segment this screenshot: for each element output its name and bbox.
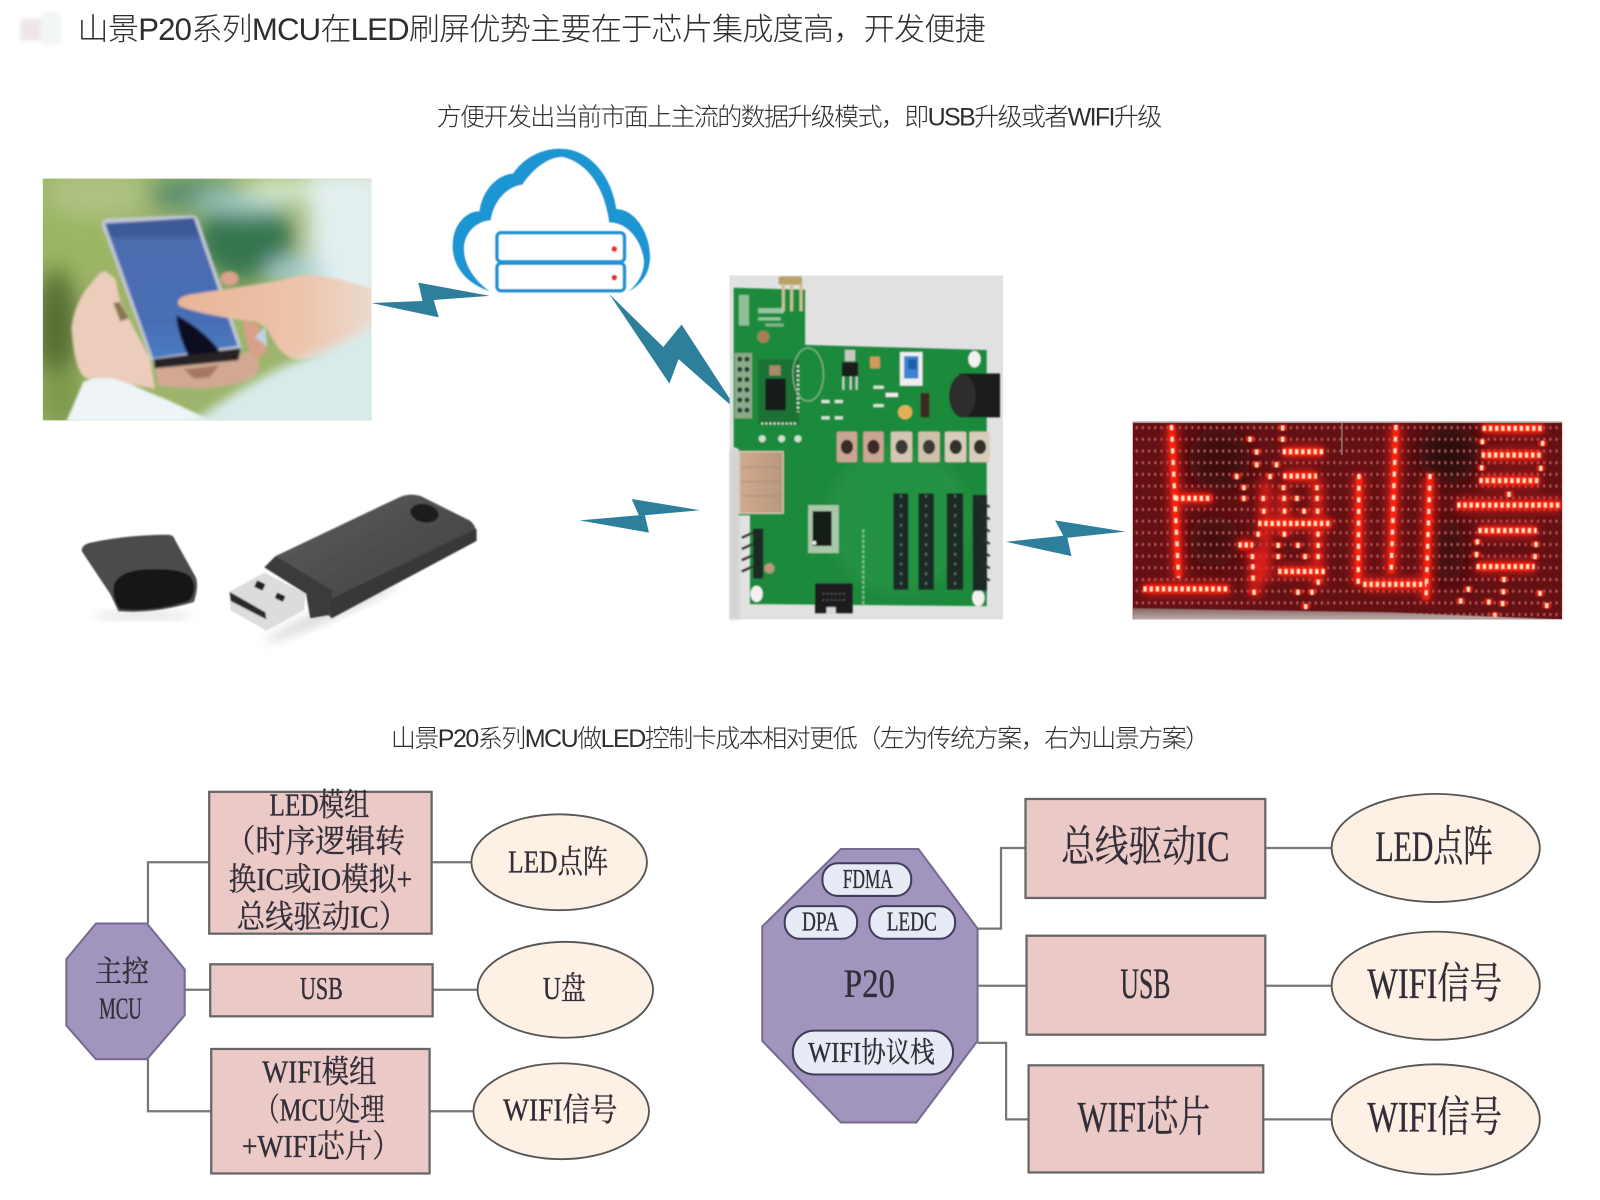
- push buttons: [837, 432, 990, 462]
- ellipse: U disk: [478, 942, 653, 1038]
- icon: cloud server: [453, 149, 650, 296]
- pill: LEDC: LEDC: [887, 906, 937, 937]
- USB socket: [739, 452, 783, 513]
- subheading: cost comparison: 山景P20系列MCU做LED控制卡成本相对更低（左为传统方案，右为山景方案）: [391, 725, 1210, 753]
- fingers under phone: [155, 352, 259, 388]
- box: WIFI module: +WIFI芯片）: [242, 1129, 400, 1164]
- photo: USB flash drive: [82, 495, 477, 648]
- box: bus driver IC: [1026, 799, 1265, 898]
- node: P20 chip: P20: [844, 962, 895, 1006]
- arrow: USB to board: [580, 499, 700, 533]
- diagram: Shanjing scheme: [762, 794, 1540, 1174]
- ellipse: LED matrix: LED点阵: [508, 844, 608, 879]
- voltage regulator: [845, 350, 855, 361]
- box: LED module: 换IC或IO模拟+: [229, 862, 412, 897]
- node: main MCU: 主控: [95, 956, 149, 989]
- module chip: [758, 359, 799, 424]
- photo: LED dot matrix panel showing 上海山景: [1133, 421, 1562, 620]
- mounting holes: [968, 351, 981, 367]
- ellipse: WIFI signal: WIFI信号: [1367, 960, 1502, 1008]
- connectors: [978, 848, 1332, 1119]
- diagram: traditional scheme: [66, 787, 653, 1173]
- title icon: [20, 12, 61, 45]
- left header: [753, 529, 763, 579]
- arrow: board to LED panel: [1006, 520, 1126, 556]
- ellipse: LED matrix: [471, 814, 647, 910]
- panel frame strip: [1133, 608, 1562, 620]
- title: 山景P20系列MCU在LED刷屏优势主要在于芯片集成度高，开发便捷: [78, 12, 986, 47]
- bright vertical LED columns: [1171, 425, 1430, 600]
- phone body: [102, 215, 242, 367]
- ellipse: WIFI signal: [473, 1063, 649, 1159]
- bright horizontal LED rows: [1143, 428, 1562, 589]
- pin headers: [893, 493, 987, 591]
- sleeve: [66, 378, 213, 421]
- drive body: [276, 495, 477, 618]
- ellipse: LED matrix: LED点阵: [1376, 824, 1493, 871]
- controller chip: [808, 505, 839, 553]
- box: USB: USB: [1120, 961, 1170, 1008]
- box: bus driver IC: 总线驱动IC: [1061, 824, 1230, 871]
- box: USB: USB: [300, 971, 343, 1006]
- photo: hand holding smartphone: [42, 178, 372, 420]
- pill: FDMA: FDMA: [843, 863, 893, 894]
- LED halo: [1143, 425, 1562, 618]
- ellipse: WIFI signal: [1332, 932, 1540, 1040]
- pill: FDMA: [822, 863, 911, 896]
- box: USB: [210, 964, 433, 1016]
- ellipse: U disk: U盘: [543, 971, 586, 1006]
- blue switch: [900, 352, 922, 386]
- box: LED module: 总线驱动IC）: [237, 900, 407, 935]
- arrow: cloud to board: [609, 294, 731, 405]
- subheading: upgrade modes: 方便开发出当前市面上主流的数据升级模式，即USB升级或者WIFI升级: [437, 104, 1162, 132]
- box: WIFI chip: WIFI芯片: [1078, 1095, 1210, 1142]
- pale trace: [862, 530, 864, 606]
- wide red haze: [1143, 426, 1562, 600]
- arrow: phone to cloud: [371, 283, 490, 317]
- box: LED module: （时序逻辑转: [226, 824, 405, 859]
- holding hand: [71, 271, 155, 389]
- module header: [735, 353, 752, 418]
- power jack: [959, 373, 1000, 417]
- photo: P20 development board: [730, 276, 1003, 619]
- connectors: [148, 862, 478, 1111]
- ellipse: WIFI signal 2: WIFI信号: [1367, 1094, 1502, 1142]
- box: WIFI chip: [1029, 1065, 1263, 1172]
- ellipse: WIFI signal: WIFI信号: [503, 1092, 617, 1127]
- box: LED module: [209, 787, 432, 935]
- pill: DPA: DPA: [802, 906, 839, 937]
- drive cap: [82, 535, 197, 612]
- node: main MCU: MCU: [99, 991, 142, 1025]
- pill: DPA: [785, 906, 857, 939]
- node: P20 chip: [762, 849, 978, 1122]
- ellipse: LED matrix: [1332, 794, 1540, 902]
- capacitors: [870, 357, 880, 368]
- pill: WIFI stack: WIFI协议栈: [808, 1037, 935, 1069]
- node: main MCU: [66, 923, 185, 1059]
- box: WIFI module: [211, 1049, 430, 1173]
- lower module parts: [759, 435, 766, 442]
- ellipse: WIFI signal 2: [1332, 1064, 1540, 1174]
- box: WIFI module: WIFI模组: [262, 1055, 377, 1090]
- box: WIFI module: （MCU处理: [255, 1092, 385, 1127]
- antenna: [779, 277, 802, 285]
- metal plug: [230, 572, 306, 631]
- box: USB: [1027, 936, 1265, 1035]
- module silkscreen: [739, 295, 784, 327]
- pill: WIFI stack: [793, 1031, 953, 1074]
- bright individual LEDs: [1237, 426, 1547, 618]
- box: LED module: LED模组: [269, 787, 369, 822]
- bottom connector: [815, 583, 853, 613]
- pointing finger and back of hand: [178, 275, 380, 359]
